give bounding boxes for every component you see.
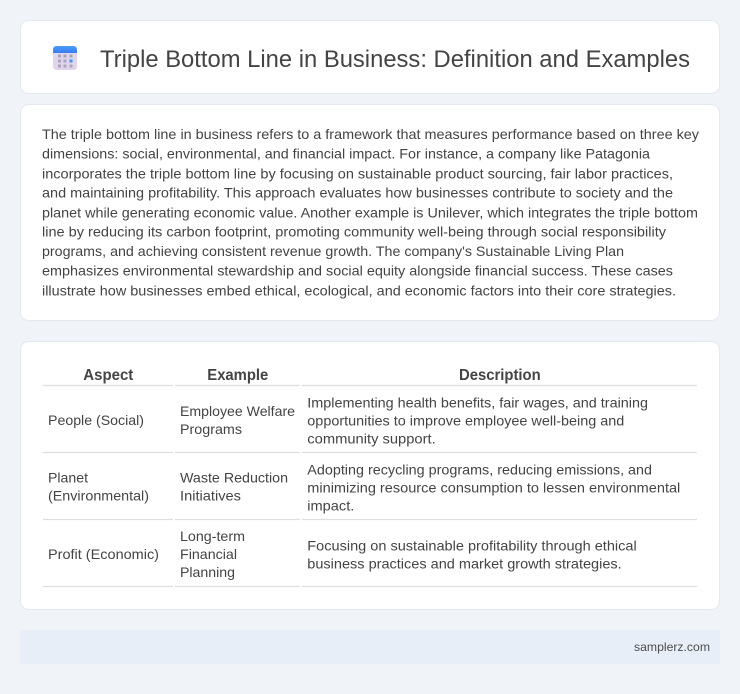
table row: profit [48,528,637,580]
table row: people: People (Social) [48,412,144,428]
panel: comparison table [20,342,720,610]
table row: planet [48,462,680,514]
table row: planet: Adopting recycling programs, reducing emissions, and [307,462,652,478]
text block: paragraph: line by reducing its carbon footprint, promoting community well-being through social responsibility [42,224,666,240]
table row: people: community support. [307,431,436,447]
table header row: Example [207,367,268,384]
table header row: Description [459,367,541,384]
table row: profit: Financial [180,546,237,562]
table row: profit: Planning [180,564,235,580]
footer source text: samplerz.com [634,640,710,654]
text block: paragraph: The triple bottom line in business refers to a framework that measures performance based on three key [42,126,699,142]
text block: paragraph: dimensions: social, environmental, and financial impact. For instance, a company like Patagonia [42,145,650,161]
table row: planet: Waste Reduction [180,470,288,486]
table row: profit: Long-term [180,528,245,544]
table row: planet: Planet [48,470,88,486]
table row: profit: business practices and market growth strategies. [307,555,622,571]
table row: planet: minimizing resource consumption to lessen environmental [307,480,680,496]
table header row: Aspect [83,367,134,384]
panel: header [20,20,720,94]
text block: paragraph: incorporates the triple bottom line by focusing on sustainable product sourcing, fair labor practices, [42,165,673,181]
text block: paragraph: programs, and achieving consistent revenue growth. The company's Sustainable Living Plan [42,243,624,259]
table row: people: Employee Welfare [180,403,295,419]
text block: paragraph: planet while generating economic value. Another example is Unilever, which integrates the triple bottom [42,204,698,220]
panel: summary paragraph [20,104,720,320]
table row: people [48,395,648,447]
table row: planet: Initiatives [180,488,241,504]
table row: profit: Focusing on sustainable profitability through ethical [307,537,637,553]
table row: planet: (Environmental) [48,488,149,504]
table row: people: opportunities to improve employee well-being and [307,413,624,429]
table row: planet: impact. [307,498,354,514]
table row: people: Implementing health benefits, fair wages, and training [307,395,648,411]
icon: calendar [53,46,77,70]
table header row [83,367,541,384]
text block: paragraph: emphasizes environmental stewardship and social equity alongside financial success. These cases [42,262,673,278]
text block: paragraph [42,126,699,298]
table row: profit: Profit (Economic) [48,546,159,562]
footer bar [20,630,720,664]
title: Triple Bottom Line in Business: Definition and Examples [100,46,690,73]
text block: paragraph: and maintaining profitability. This approach evaluates how businesses contribute to society and the [42,184,673,200]
table row: people: Programs [180,421,242,437]
text block: paragraph: illustrate how businesses embed ethical, ecological, and economic factors into their core strategies. [42,282,676,298]
